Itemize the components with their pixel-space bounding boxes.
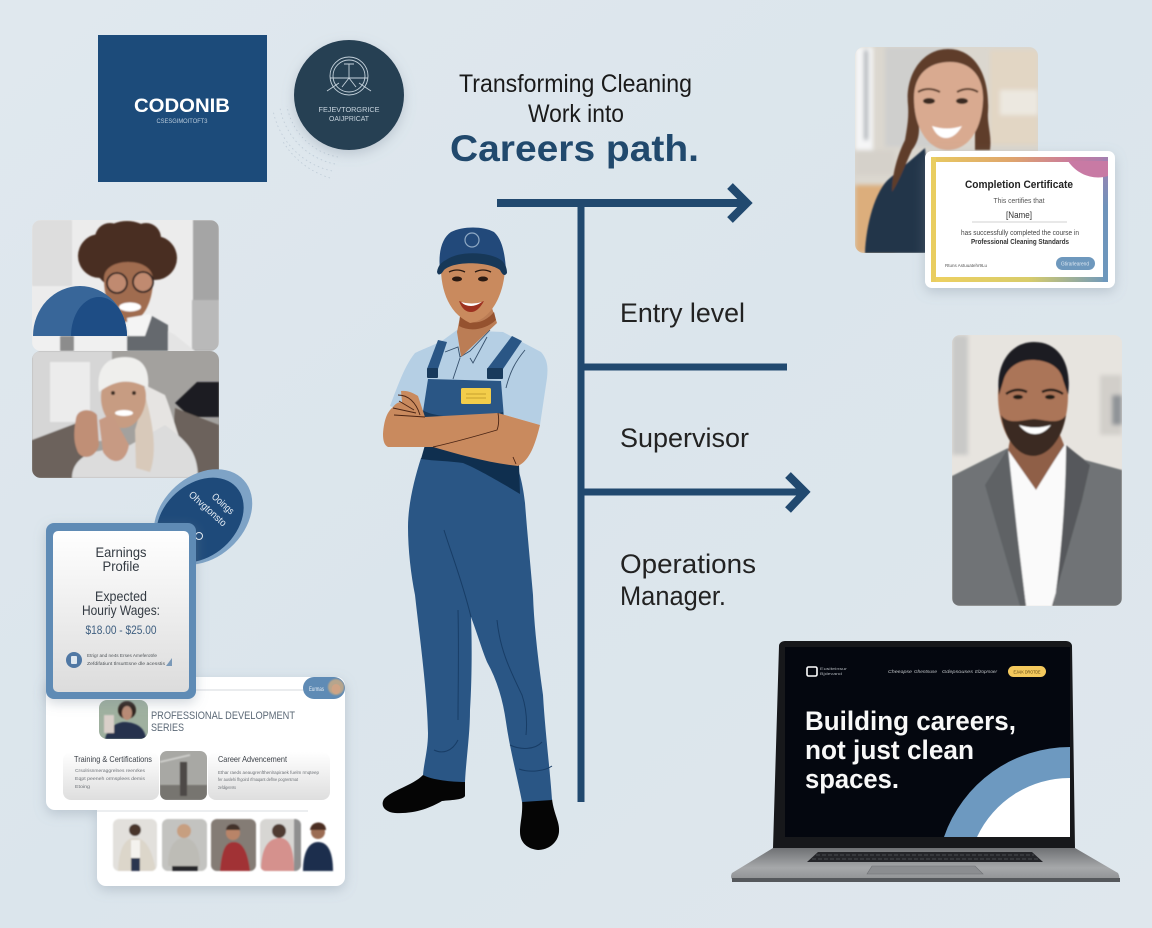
- vertical path line: [578, 205, 584, 802]
- certificate button: Gtirarlearend: [1061, 262, 1089, 268]
- screen headline: spaces.: [805, 764, 899, 794]
- dark waist band: [421, 445, 520, 494]
- subcard: training: Eqpt peeneh ormsplees demis: [75, 776, 146, 781]
- bib and straps: [422, 336, 522, 418]
- photo: woman in white hat waving: [32, 351, 219, 478]
- panel heading: PROFESSIONAL DEVELOPMENT: [151, 710, 295, 722]
- panel heading: SERIES: [151, 722, 184, 734]
- completion certificate: Rtuns Astuuatehr9Lu: [945, 263, 987, 268]
- entry level branch: [584, 364, 787, 370]
- certificate border: [931, 157, 1108, 282]
- completion certificate: [925, 151, 1115, 288]
- certificate button: [1056, 257, 1095, 270]
- laptop mockup: [731, 641, 1120, 882]
- panel: earnings profile card: Expected: [95, 588, 147, 604]
- site nav: Cheeapse: [888, 669, 913, 674]
- panel: earnings profile card: Profile: [102, 558, 140, 574]
- shirt: [390, 330, 547, 425]
- panel: earnings profile card: Houriy Wages:: [82, 602, 160, 618]
- photo: smiling woman with curly hair: [32, 220, 219, 351]
- subcard: career advancement: 2efdigerrets: [218, 785, 237, 790]
- subcard: career advancement: Ethar raeds aeaugrenfthenlrapiraek fuelm rmqteep: [218, 770, 319, 775]
- rotated badge: Ooings: [209, 492, 236, 517]
- crossed arms: [383, 391, 540, 466]
- logo: square brand tile: CODONIB: [134, 96, 230, 117]
- keyboard: [807, 852, 1043, 862]
- laptop lid and screen: [773, 641, 1075, 848]
- face: [441, 257, 505, 323]
- completion certificate: This certifies that: [994, 198, 1045, 205]
- neck: [457, 308, 497, 357]
- panel: professional development series: [46, 677, 345, 886]
- top arrow: [497, 186, 747, 220]
- profile pill: [303, 677, 345, 699]
- site nav: Gdepsouses: [942, 669, 974, 674]
- career path arrows: [497, 186, 805, 802]
- site nav: EJAIK DROTDE: [1014, 670, 1040, 674]
- photo: man in grey suit: [952, 335, 1122, 606]
- photo row: team portraits: [113, 819, 333, 871]
- info icon and note: Etrigr and ne4s Erses Ameferotrle: [87, 653, 158, 658]
- shoes: [383, 775, 559, 850]
- info icon and note: [66, 652, 172, 668]
- completion certificate: Completion Certificate: [965, 179, 1073, 191]
- screen headline: not just clean: [805, 735, 974, 765]
- circular emblem badge: [273, 40, 404, 178]
- site nav: Eusiteinsur: [820, 666, 848, 671]
- completion certificate: Professional Cleaning Standards: [971, 239, 1069, 246]
- site nav: Bjdevand: [820, 671, 842, 676]
- label: Operations Manager: Manager.: [620, 581, 726, 611]
- photo: woman with certificate background: [855, 47, 1038, 253]
- wage range: $18.00 - $25.00: [86, 623, 157, 637]
- rotated badge: [135, 450, 271, 584]
- avatar: [99, 700, 148, 739]
- screen headline: Building careers,: [805, 706, 1016, 736]
- circular emblem badge: OAIJPRICAT: [329, 114, 369, 123]
- name badge: [461, 388, 491, 404]
- label: Operations Manager: [620, 549, 756, 611]
- supervisor branch arrow: [584, 475, 805, 510]
- screen graphic arc: [944, 747, 1070, 837]
- subcard: training: Training & Certifications: [74, 754, 152, 764]
- info icon and note: Zefdifatiunt tlrsurEsne dle acesstis: [87, 661, 166, 666]
- site nav: [807, 666, 1046, 677]
- label: Entry level: Entry level: [620, 298, 745, 328]
- cap: [437, 228, 507, 275]
- site nav: Elzoprsoer: [975, 669, 998, 674]
- subcard: career advancement: fer auslehi fhgoird rfmaqant deflne pogrentmat: [218, 777, 299, 782]
- subcard: training: Etoing: [75, 784, 91, 789]
- subcard: career advancement: Career Advencement: [218, 754, 288, 764]
- site nav: Ghentnuse: [914, 669, 938, 674]
- title: Transforming Cleaning: [459, 70, 692, 98]
- label: Operations Manager: Operations: [620, 549, 756, 579]
- panel: earnings profile card: [46, 523, 196, 699]
- completion certificate: [Name]: [1006, 210, 1032, 220]
- logo: square brand tile: CSESGIMOITOFT3: [156, 118, 208, 125]
- laptop base: [731, 848, 1119, 881]
- label: Supervisor: Supervisor: [620, 423, 749, 453]
- trousers: [408, 458, 552, 802]
- subcard: training: Crsolrisnmeraggrelnes reenrkes: [75, 768, 146, 773]
- subcard: career advancement: [208, 752, 330, 800]
- subcard photo: [160, 751, 207, 800]
- circular emblem badge: FEJEVTORGRICE: [318, 105, 380, 114]
- completion certificate: has successfully completed the course in: [961, 230, 1079, 237]
- worker illustration: [383, 228, 559, 850]
- title: [450, 70, 699, 169]
- title: Work into: [528, 100, 624, 128]
- profile pill: Eurmas: [309, 687, 324, 693]
- screen headline: [805, 706, 1016, 794]
- subcard: training: [63, 752, 159, 800]
- title: Careers path.: [450, 128, 699, 169]
- trackpad: [867, 866, 983, 874]
- logo: square brand tile: [98, 35, 267, 182]
- rotated badge: Ohvgtonsto: [186, 490, 229, 529]
- decorative blue half circles: [33, 286, 127, 336]
- panel: earnings profile card: Earnings: [96, 544, 146, 560]
- panel heading: [151, 710, 295, 734]
